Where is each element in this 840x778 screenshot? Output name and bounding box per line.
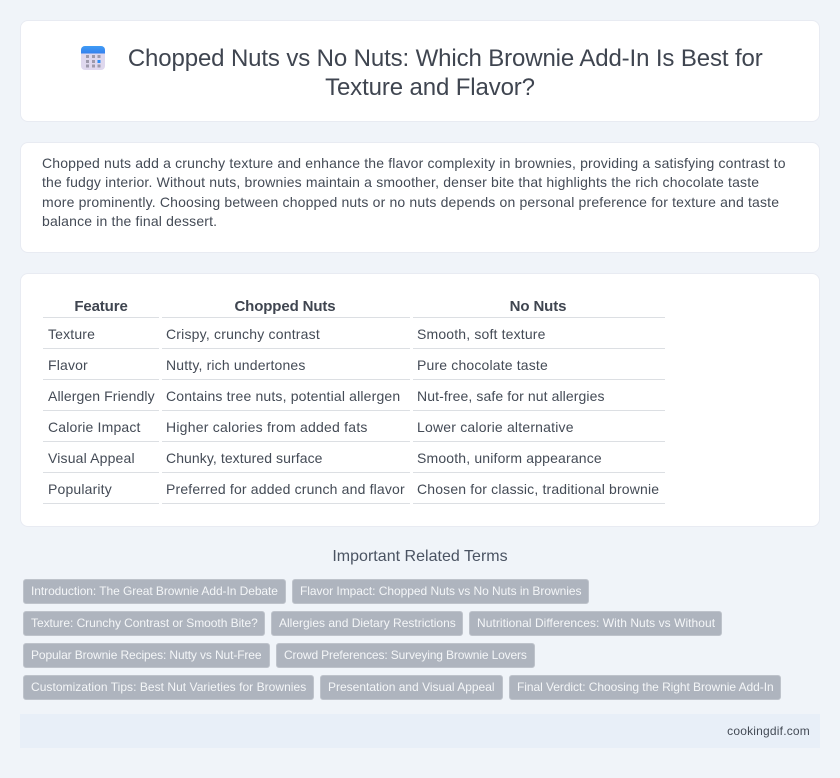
footer bar: [20, 714, 820, 748]
table headings: Feature: [74, 298, 128, 315]
related term tags: Final Verdict: Choosing the Right Brownie Add-In: [517, 680, 774, 694]
table rows: Contains tree nuts, potential allergen: [166, 388, 400, 404]
title: [128, 45, 763, 101]
related term tags: Popular Brownie Recipes: Nutty vs Nut-Free: [31, 648, 261, 662]
intro paragraph: Chopped nuts add a crunchy texture and enhance the flavor complexity in brownies, providing a satisfying contrast to: [42, 155, 786, 171]
related term tags: [23, 579, 781, 700]
related terms heading: Important Related Terms: [332, 548, 508, 565]
table rows: Nut-free, safe for nut allergies: [417, 388, 605, 404]
related term tags: Crowd Preferences: Surveying Brownie Lovers: [284, 648, 527, 662]
table rows: Texture: [48, 326, 95, 342]
related term tags: Allergies and Dietary Restrictions: [279, 616, 456, 630]
title: Texture and Flavor?: [325, 74, 535, 101]
intro paragraph: [42, 155, 786, 229]
table rows: Chosen for classic, traditional brownie: [417, 481, 659, 497]
intro paragraph: more prominently. Choosing between chopped nuts or no nuts depends on personal preference for texture and taste: [42, 194, 779, 210]
table rows: Preferred for added crunch and flavor: [166, 481, 405, 497]
table headings: [74, 298, 566, 315]
related term tags: Customization Tips: Best Nut Varieties for Brownies: [31, 680, 306, 694]
footer site name: cookingdif.com: [727, 724, 810, 738]
related term tags: Introduction: The Great Brownie Add-In Debate: [31, 584, 278, 598]
header panel: [20, 20, 820, 122]
icon: calendar: [81, 46, 105, 70]
table rows: Flavor: [48, 357, 88, 373]
table rows: Smooth, soft texture: [417, 326, 546, 342]
table rows: [43, 317, 665, 504]
table rows: Pure chocolate taste: [417, 357, 548, 373]
table rows: Crispy, crunchy contrast: [166, 326, 320, 342]
table rows: Allergen Friendly: [48, 388, 155, 404]
related term tags: Presentation and Visual Appeal: [328, 680, 495, 694]
table rows: Nutty, rich undertones: [166, 357, 306, 373]
related term tags: Flavor Impact: Chopped Nuts vs No Nuts in Brownies: [300, 584, 581, 598]
table rows: Lower calorie alternative: [417, 419, 574, 435]
table rows: Popularity: [48, 481, 112, 497]
intro text panel: [20, 142, 820, 253]
table headings: Chopped Nuts: [234, 298, 336, 315]
table rows: Calorie Impact: [48, 419, 141, 435]
table rows: Higher calories from added fats: [166, 419, 368, 435]
table rows: Smooth, uniform appearance: [417, 450, 602, 466]
related term tags: Nutritional Differences: With Nuts vs Without: [477, 616, 715, 630]
title: Chopped Nuts vs No Nuts: Which Brownie Add-In Is Best for: [128, 45, 763, 72]
table rows: Chunky, textured surface: [166, 450, 323, 466]
table rows: Visual Appeal: [48, 450, 135, 466]
intro paragraph: balance in the final dessert.: [42, 213, 217, 229]
table headings: No Nuts: [510, 298, 566, 315]
intro paragraph: the fudgy interior. Without nuts, brownies maintain a smoother, denser bite that highlights the rich chocolate taste: [42, 174, 759, 190]
comparison table panel: [20, 273, 820, 527]
related term tags: Texture: Crunchy Contrast or Smooth Bite?: [31, 616, 258, 630]
